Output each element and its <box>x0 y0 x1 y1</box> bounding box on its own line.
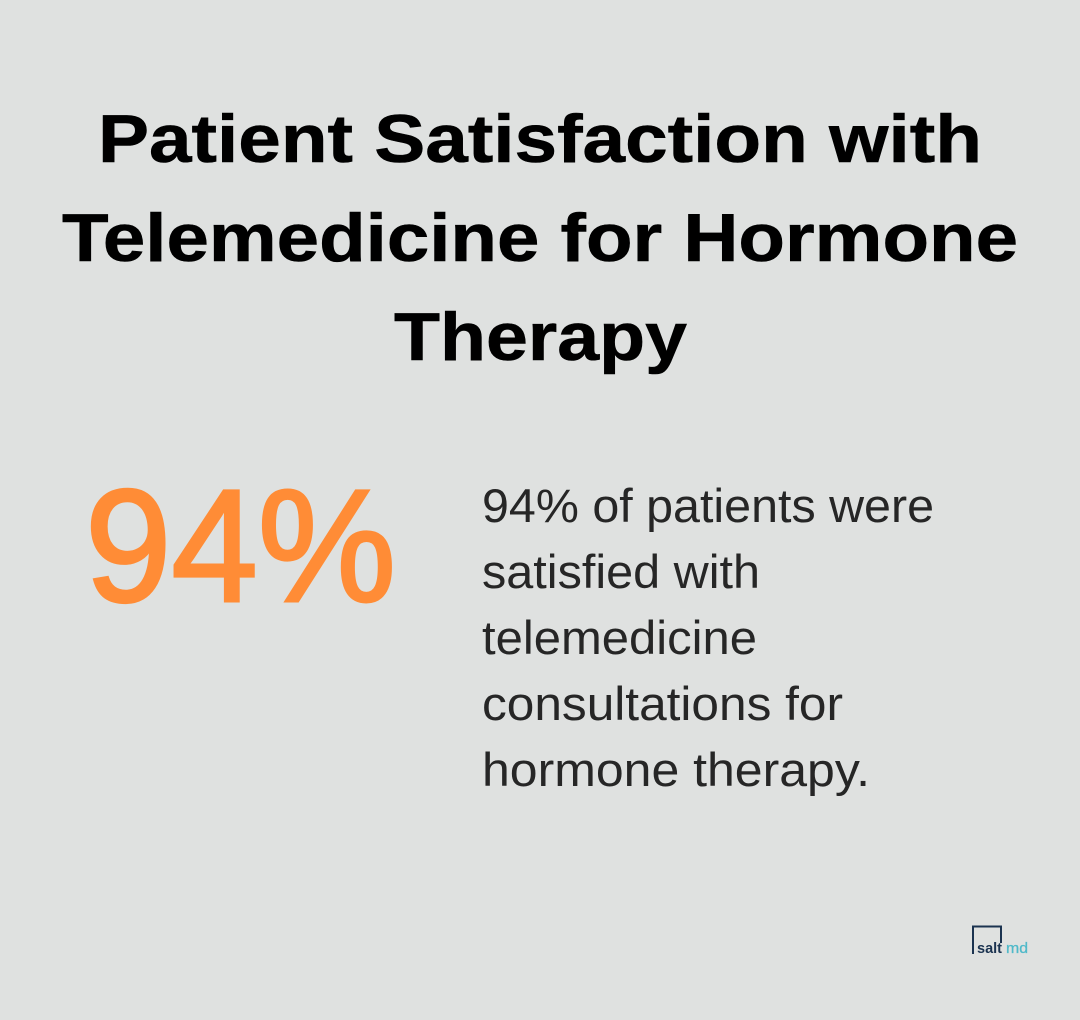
description text <box>482 479 934 796</box>
description text: telemedicine <box>482 611 757 664</box>
description text: consultations for <box>482 677 843 730</box>
description text: satisfied with <box>482 545 760 598</box>
description text: 94% of patients were <box>482 479 934 532</box>
description text: hormone therapy. <box>482 743 870 796</box>
big statistic: 94%: 94% <box>85 456 396 635</box>
title: Telemedicine for Hormone <box>62 200 1018 276</box>
title: Therapy <box>394 299 687 375</box>
title <box>62 101 1018 375</box>
logo wordmark: salt: salt <box>977 940 1002 957</box>
logo wordmark: md: md <box>1006 940 1028 957</box>
title: Patient Satisfaction with <box>98 101 982 177</box>
logo: saltmd <box>973 926 1028 957</box>
logo icon: open square <box>973 926 1001 954</box>
